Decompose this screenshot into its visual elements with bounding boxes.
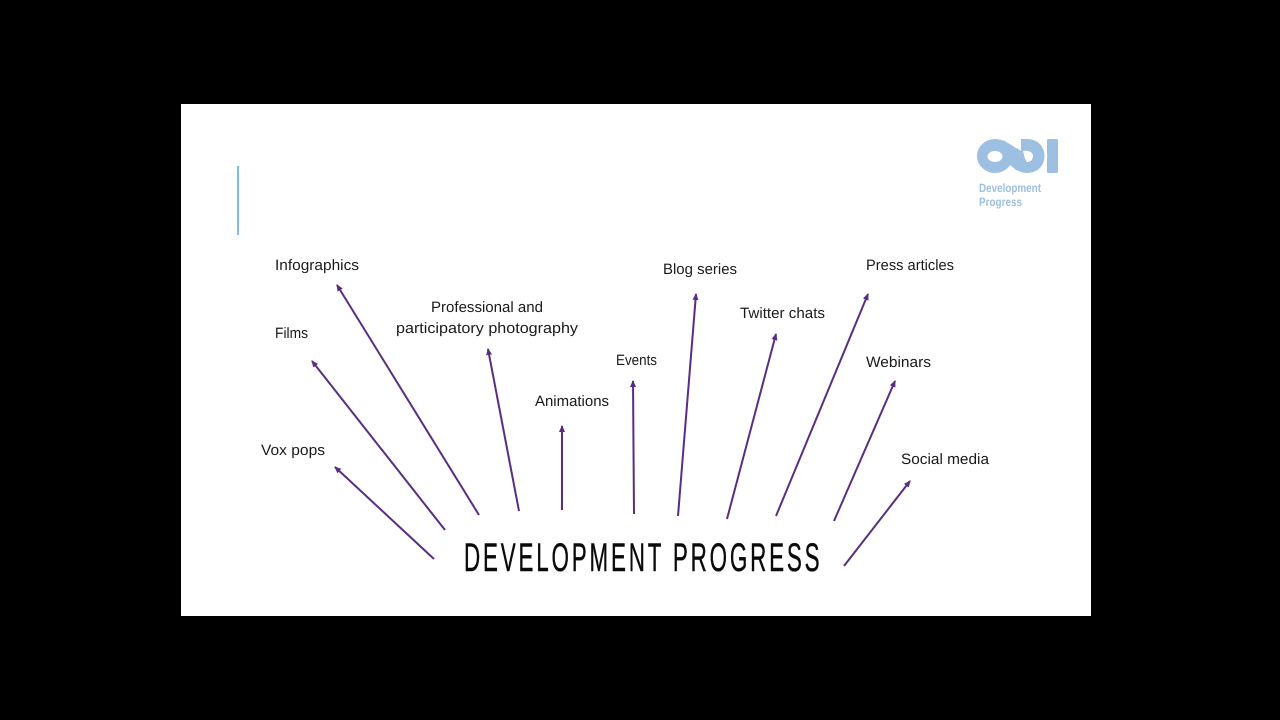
label: Webinars: Webinars <box>866 354 931 371</box>
arrow: films <box>312 361 445 530</box>
label: Press articles: Press articles <box>866 257 954 274</box>
label: Infographics: Infographics <box>275 257 359 274</box>
label: Vox pops: Vox pops <box>261 442 325 459</box>
arrow: twitter chats <box>727 334 776 519</box>
heading: Development Progress: DEVELOPMENT PROGRESS <box>464 536 820 580</box>
label: Events: Events <box>616 352 657 369</box>
arrow: blog series <box>678 294 696 516</box>
label: Professional and participatory photography <box>396 299 579 337</box>
accent bar <box>237 166 239 235</box>
logo text: Progress <box>979 195 1022 209</box>
slide panel <box>181 104 1091 616</box>
label: Professional and participatory photography: participatory photography <box>396 320 579 337</box>
arrow: photography <box>488 349 519 511</box>
arrow: social media <box>844 481 910 566</box>
arrows <box>312 285 910 566</box>
arrow: press articles <box>776 294 868 516</box>
arrow: infographics <box>337 285 479 515</box>
logo text: Development <box>979 181 1041 195</box>
label: Animations: Animations <box>535 393 609 410</box>
label: Social media: Social media <box>901 451 990 468</box>
label: Twitter chats: Twitter chats <box>740 305 825 322</box>
label: Professional and participatory photography: Professional and <box>431 299 543 316</box>
label: Films: Films <box>275 325 308 342</box>
logo text <box>979 181 1041 209</box>
arrow: events <box>633 381 634 514</box>
label: Blog series: Blog series <box>663 261 737 278</box>
arrow: vox pops <box>335 467 434 559</box>
arrow: webinars <box>834 381 895 521</box>
arrow: animations <box>561 426 563 510</box>
icon: ODI logo <box>977 139 1058 173</box>
